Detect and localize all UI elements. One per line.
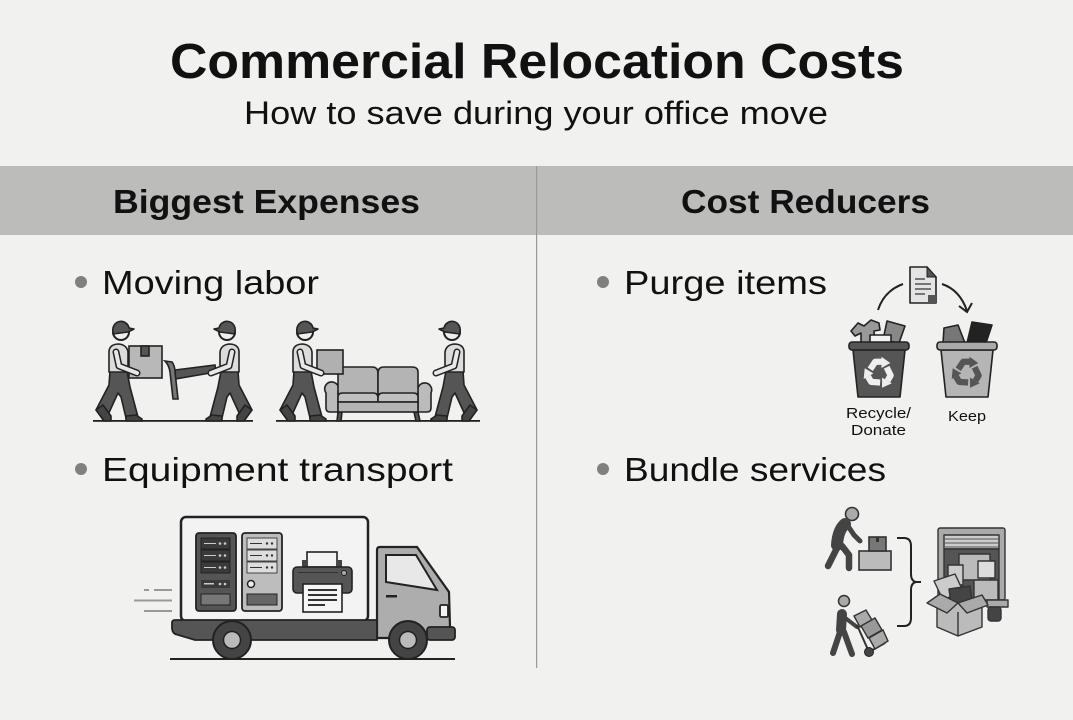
title: Commercial Relocation Costs [170, 35, 904, 89]
label: recycle/donate: Donate [851, 422, 906, 439]
bullet: bundle services: Bundle services [624, 451, 886, 488]
icon: purge items flow [846, 267, 997, 439]
server rack dark [196, 533, 236, 611]
icon: truck carrying equipment [134, 517, 455, 660]
icon: person lifting boxes [828, 508, 891, 570]
printer [293, 552, 352, 612]
subtitle: How to save during your office move [244, 95, 828, 131]
label: recycle/donate: Recycle/ [846, 405, 912, 422]
icon: movers carrying box and sofa [276, 321, 480, 422]
icon: document [910, 267, 936, 303]
heading: cost reducers: Cost Reducers [681, 183, 930, 220]
bullet: equipment transport: Equipment transport [102, 451, 453, 488]
icon: truck rear with boxes [938, 528, 1008, 621]
icon: movers carrying box and chair [93, 321, 253, 422]
heading: biggest expenses: Biggest Expenses [113, 183, 420, 220]
server tower light [242, 533, 282, 611]
bullet: moving labor: Moving labor [102, 264, 319, 301]
icon: bundle services flow [828, 508, 1008, 656]
arrow: left arc [878, 284, 903, 310]
arrow: right arc [942, 284, 972, 312]
icon: open box with items [927, 565, 988, 636]
icon: person with hand truck [833, 596, 888, 656]
icon: keep bin [937, 322, 997, 397]
label: recycle/donate [846, 405, 912, 439]
column header band [0, 166, 1073, 235]
brace [897, 538, 921, 626]
label: keep: Keep [948, 408, 986, 425]
icon: recycle bin [849, 320, 909, 397]
bullet: purge items: Purge items [624, 264, 827, 301]
